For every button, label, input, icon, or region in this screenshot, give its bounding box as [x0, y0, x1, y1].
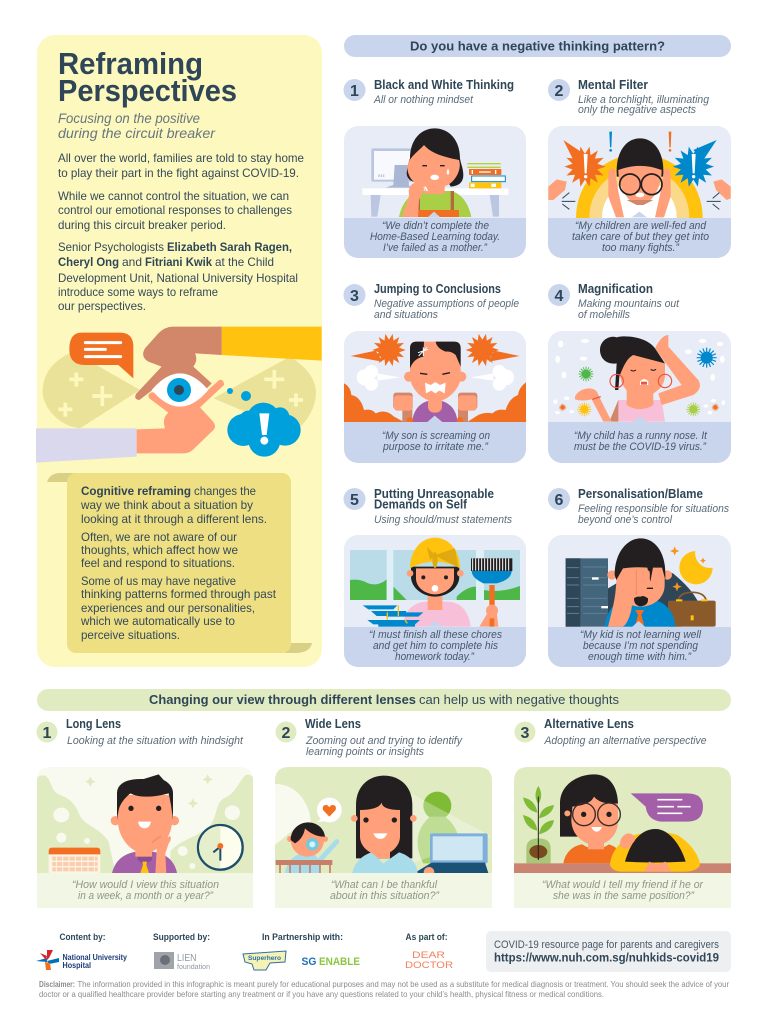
callout: cognitive reframing scroll — [47, 473, 312, 653]
lens 2 heading: Wide Lens — [305, 717, 361, 731]
quote 6: “My kid is not learning well — [580, 629, 702, 641]
credit: as part of: DOCTOR — [405, 960, 453, 971]
callout: cognitive reframing scroll: perceive situations. — [81, 628, 180, 642]
disclaimer: doctor or a qualified healthcare provider before starting any treatment or if you have any questions related to your child’s health, physical fitness or medical conditions. — [39, 989, 604, 999]
quote 6: because I’m not spending — [583, 640, 698, 652]
pattern 3 heading: and situations — [374, 309, 439, 321]
text block: introduction: our perspectives. — [58, 299, 146, 313]
quote 4: must be the COVID-19 virus.” — [574, 441, 706, 453]
credit: content by: National University — [62, 953, 127, 962]
lens card 2: wide lens — [275, 767, 492, 908]
credit: in partnership with: In Partnership with: — [262, 932, 343, 942]
text block: introduction: Elizabeth Sarah Ragen, — [167, 240, 292, 254]
pattern 2 heading: only the negative aspects — [578, 104, 697, 116]
pattern 3 heading: Negative assumptions of people — [374, 298, 519, 310]
credit: supported by: Supported by: — [153, 932, 210, 942]
card 6: tired father — [548, 535, 731, 667]
credit: content by: Hospital — [62, 961, 91, 970]
lens 2 heading — [276, 717, 463, 758]
heading: negative thinking pattern: Do you have a negative thinking pattern? — [410, 40, 665, 54]
quote 3 — [382, 430, 490, 453]
credit: content by: Content by: — [60, 932, 106, 942]
quote 5: and get him to complete his — [373, 640, 499, 652]
quote 3: “My son is screaming on — [382, 430, 490, 442]
pattern 2 heading: Like a torchlight, illuminating — [578, 94, 709, 106]
callout: cognitive reframing scroll: looking at it through a different lens. — [81, 512, 267, 526]
text block: introduction: during this circuit breaker period. — [58, 218, 226, 232]
credit: supported by: foundation — [177, 964, 210, 971]
title: Reframing — [58, 46, 203, 81]
quote 1 — [370, 221, 499, 251]
quote 5: “I must finish all these chores — [369, 629, 503, 641]
text block: introduction: to play their part in the fight against COVID-19. — [58, 166, 299, 180]
resource link box — [486, 931, 731, 972]
credit: supported by — [153, 932, 210, 971]
heading: different lenses — [37, 689, 731, 711]
disclaimer — [39, 979, 729, 999]
panel: intro — [36, 35, 322, 667]
lens card 3: alternative lens — [514, 767, 732, 908]
text block: introduction: introduce some ways to reframe — [58, 285, 218, 299]
quote 2: taken care of but they get into — [572, 231, 709, 243]
resource link box: https://www.nuh.com.sg/nuhkids-covid19 — [494, 950, 719, 964]
quote 2: “My children are well-fed and — [575, 220, 707, 232]
credit: in partnership with: ENABLE — [319, 956, 360, 968]
pattern 6 heading — [548, 487, 730, 526]
lens 1 heading: Looking at the situation with hindsight — [67, 735, 244, 747]
lens quote 2: about in this situation?” — [330, 890, 439, 902]
pattern 6 heading: Feeling responsible for situations — [578, 503, 730, 515]
lens quote 2 — [330, 880, 440, 899]
pattern 4 heading: 4 — [555, 288, 564, 305]
pattern 2 heading: Mental Filter — [578, 78, 648, 92]
lens quote 1: in a week, a month or a year?” — [78, 890, 213, 902]
pattern 4 heading: of molehills — [578, 309, 631, 321]
title — [58, 46, 237, 108]
lens quote 3: she was in the same position?” — [553, 890, 694, 902]
quote 4 — [574, 431, 708, 450]
text block: introduction: Senior Psychologists — [58, 240, 164, 254]
text block: introduction: Cheryl Ong — [58, 255, 119, 269]
pattern 5 heading: 5 — [350, 492, 359, 509]
quote 6: enough time with him.” — [588, 651, 691, 663]
text block: introduction: All over the world, families are told to stay home — [58, 151, 304, 165]
pattern 5 heading: Demands on Self — [374, 498, 468, 512]
credit: as part of: As part of: — [406, 932, 448, 942]
credit: content by — [36, 932, 127, 970]
credit: in partnership with: SG — [302, 956, 316, 968]
pattern 2 heading — [548, 78, 709, 116]
pattern 4 heading: Magnification — [578, 282, 653, 296]
illustration: framing the eye with hands — [36, 327, 322, 463]
pattern 5 heading: Using should/must statements — [374, 514, 513, 526]
pattern 6 heading: 6 — [555, 492, 564, 509]
callout: cognitive reframing scroll: thoughts, which affect how we — [81, 543, 238, 557]
heading: different lenses: Changing our view through different lenses — [149, 693, 416, 707]
quote 3: purpose to irritate me.” — [382, 441, 488, 453]
credit: supported by: LIEN — [177, 953, 196, 964]
heading: negative thinking pattern — [344, 35, 731, 57]
pattern 6 heading: Personalisation/Blame — [578, 487, 703, 501]
disclaimer: Disclaimer: — [39, 979, 75, 989]
text block: introduction: at the Child — [215, 255, 274, 269]
subtitle — [58, 110, 216, 141]
callout: cognitive reframing scroll: feel and respond to situations. — [81, 556, 235, 570]
heading: different lenses: can help us with negative thoughts — [419, 693, 619, 707]
pattern 4 heading: Making mountains out — [578, 298, 680, 310]
lens 3 heading — [514, 717, 706, 747]
quote 1: “We didn’t complete the — [382, 220, 489, 232]
resource link box: COVID-19 resource page for parents and caregivers — [494, 939, 719, 951]
lens 2 heading: Zooming out and trying to identify — [305, 735, 463, 747]
lens 2 heading: learning points or insights — [306, 746, 425, 758]
lens quote 1 — [72, 879, 219, 902]
card 4: woman and viruses — [548, 331, 731, 463]
lens 3 heading: 3 — [521, 725, 530, 742]
quote 2 — [572, 220, 709, 254]
pattern 2 heading: 2 — [555, 83, 564, 100]
callout: cognitive reframing scroll: changes the — [194, 484, 256, 498]
pattern 6 heading: beyond one’s control — [578, 514, 673, 526]
quote 6 — [580, 629, 702, 663]
pattern 4 heading — [548, 282, 680, 321]
callout: cognitive reframing scroll: experiences and our personalities, — [81, 601, 255, 615]
lens 1 heading — [36, 717, 244, 747]
pattern 1 heading: 1 — [350, 83, 359, 100]
callout: cognitive reframing scroll: which we automatically use to — [80, 614, 235, 628]
lens 2 heading: 2 — [282, 725, 291, 742]
callout: cognitive reframing scroll: Often, we are not aware of our — [81, 530, 237, 544]
pattern 1 heading: Black and White Thinking — [374, 78, 514, 92]
card 3: angry boy — [344, 331, 527, 463]
card 2: man with glasses and bursts — [548, 126, 731, 258]
pattern 5 heading: Putting Unreasonable — [374, 487, 494, 501]
pattern 5 heading — [344, 487, 513, 526]
lens quote 1: “How would I view this situation — [72, 879, 219, 891]
quote 1: I’ve failed as a mother.” — [383, 242, 487, 254]
lens quote 3 — [542, 879, 703, 902]
quote 2: too many fights.” — [602, 242, 679, 254]
callout: cognitive reframing scroll: Some of us may have negative — [81, 574, 236, 588]
callout: cognitive reframing scroll: way we think about a situation by — [80, 498, 253, 512]
subtitle: Focusing on the positive — [58, 110, 200, 126]
text block: introduction: and — [122, 255, 142, 269]
quote 4: “My child has a runny nose. It — [574, 430, 708, 442]
pattern 1 heading: All or nothing mindset — [373, 94, 474, 106]
credit: in partnership with: Superhero — [248, 956, 281, 962]
lens 1 heading: 1 — [43, 725, 52, 742]
text block: introduction: control our emotional responses to challenges — [58, 203, 292, 217]
lens card 1: long lens — [37, 767, 254, 908]
text block: introduction: Development Unit, National University Hospital — [58, 271, 298, 285]
text block: introduction: While we cannot control the situation, we can — [58, 189, 289, 203]
text block: introduction: Fitriani Kwik — [145, 255, 212, 269]
pattern 1 heading — [344, 78, 514, 106]
pattern 3 heading: Jumping to Conclusions — [374, 282, 501, 296]
callout: cognitive reframing scroll: thinking patterns formed through past — [81, 587, 277, 601]
quote 5: homework today.” — [395, 651, 474, 663]
subtitle: during the circuit breaker — [58, 125, 216, 141]
lens quote 3: “What would I tell my friend if he or — [542, 879, 703, 891]
credit: as part of: DEAR — [412, 950, 445, 961]
text block: introduction — [58, 151, 304, 313]
pattern 3 heading — [344, 282, 519, 321]
title: Perspectives — [58, 73, 237, 108]
pattern 3 heading: 3 — [350, 288, 359, 305]
lens 3 heading: Alternative Lens — [544, 717, 634, 731]
lens 1 heading: Long Lens — [66, 717, 121, 731]
card 5: woman doing chores — [344, 535, 526, 667]
callout: cognitive reframing scroll: Cognitive reframing — [81, 484, 191, 498]
lens 3 heading: Adopting an alternative perspective — [544, 735, 706, 747]
credit: as part of — [405, 932, 453, 971]
quote 5 — [369, 629, 503, 663]
credit: in partnership with — [243, 932, 360, 970]
quote 1: Home-Based Learning today. — [370, 231, 500, 243]
lens quote 2: “What can I be thankful — [331, 879, 438, 891]
card 1: woman at desk — [344, 126, 526, 258]
